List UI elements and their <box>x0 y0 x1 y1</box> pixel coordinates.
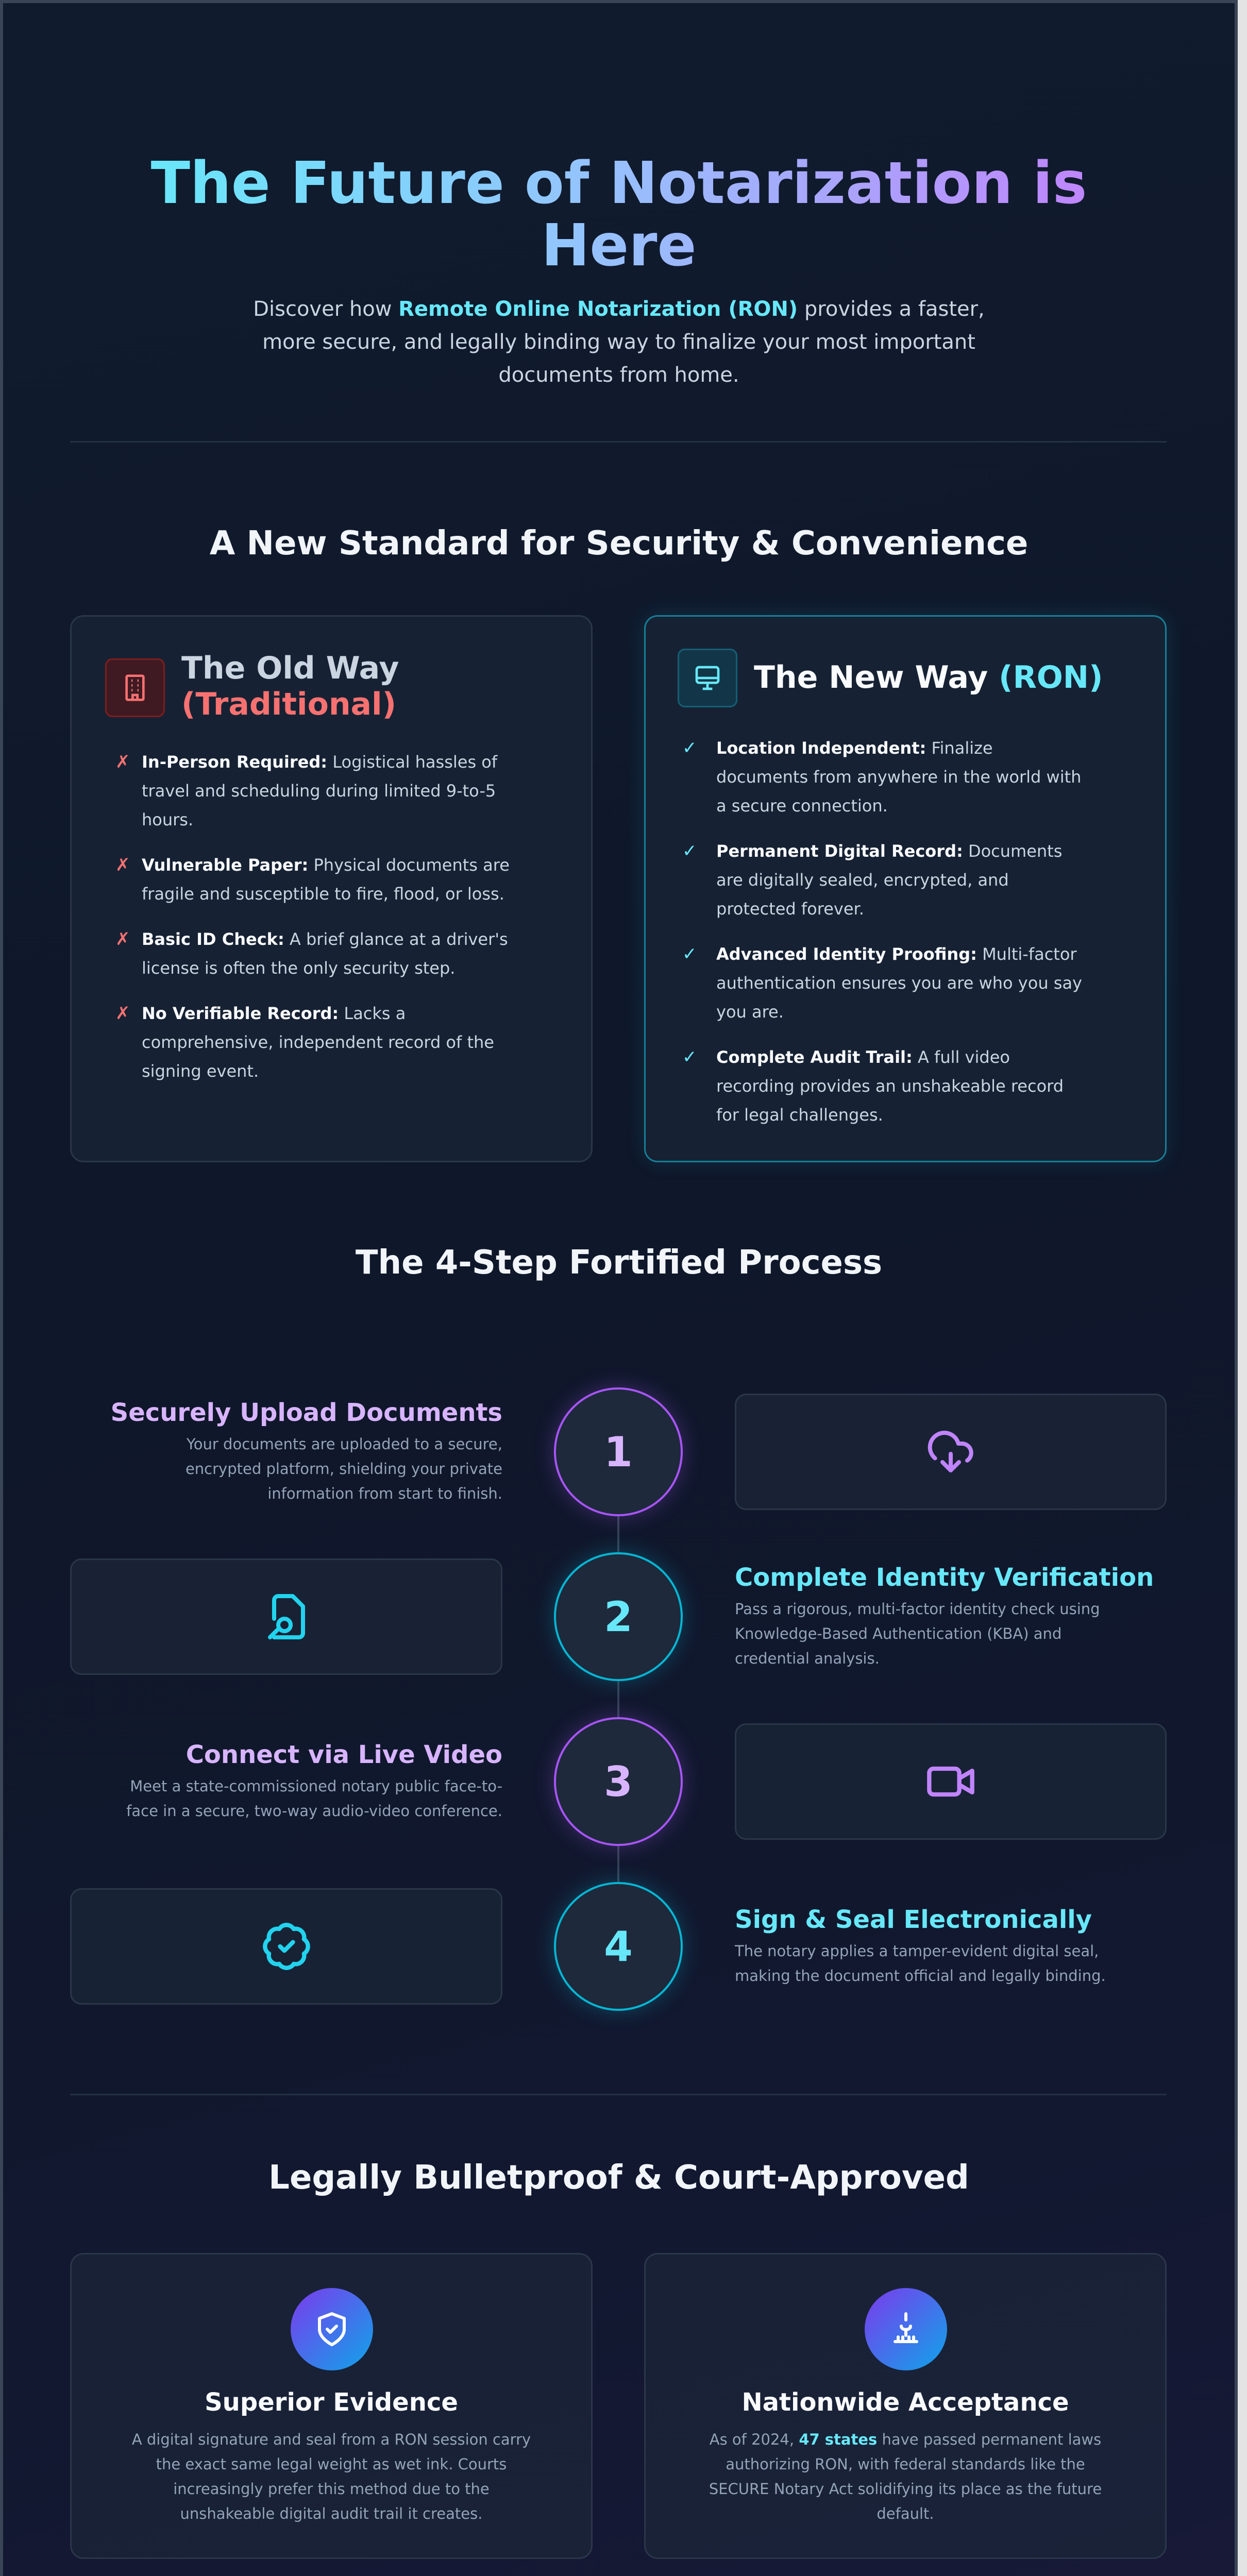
step 1 text: information from start to finish. <box>267 1485 502 1502</box>
old way title <box>181 650 399 722</box>
heading: legally bulletproof: Legally Bulletproof & Court-Approved <box>268 2159 969 2197</box>
nationwide text: authorizing RON, with federal standards like the <box>726 2455 1085 2473</box>
new way list: ✓ <box>682 738 697 758</box>
step 2 text: credential analysis. <box>735 1650 880 1667</box>
old way list: ✗ <box>115 752 130 772</box>
subtitle <box>253 297 985 387</box>
subtitle: more secure, and legally binding way to finalize your most important <box>262 330 975 354</box>
old way list: signing event. <box>142 1061 259 1081</box>
new way title: The New Way (RON) <box>754 659 1103 696</box>
superior evidence text: unshakeable digital audit trail it creates. <box>180 2505 482 2522</box>
old way list: travel and scheduling during limited 9-to-5 <box>142 781 496 801</box>
panel: nationwide acceptance <box>644 2253 1167 2559</box>
superior evidence title: Superior Evidence <box>205 2388 458 2417</box>
new way list: ✓ <box>682 841 697 861</box>
subtitle: documents from home. <box>498 363 739 387</box>
old way list: hours. <box>142 810 193 829</box>
step 1 text: encrypted platform, shielding your private <box>186 1460 502 1478</box>
icon: building <box>105 658 165 717</box>
new way list: you are. <box>716 1002 784 1022</box>
step 4 text <box>735 1905 1106 1985</box>
step 4 number: 4 <box>604 1923 633 1970</box>
superior evidence text: A digital signature and seal from a RON session carry <box>132 2431 531 2448</box>
step 2 icon box: file search <box>70 1558 502 1675</box>
step 1 text: Your documents are uploaded to a secure, <box>187 1435 502 1453</box>
step 4 icon box: badge check <box>70 1888 502 2005</box>
new way list: for legal challenges. <box>716 1105 883 1125</box>
old way list: ✗ <box>115 855 130 875</box>
nationwide title: Nationwide Acceptance <box>742 2388 1069 2417</box>
panel: new way <box>644 615 1167 1162</box>
old way title: (Traditional) <box>181 686 396 722</box>
step 3 text: face in a secure, two-way audio-video conference. <box>126 1802 502 1820</box>
old way list: In-Person Required: Logistical hassles of <box>142 752 497 772</box>
nationwide text: default. <box>877 2505 934 2522</box>
superior evidence text <box>132 2431 531 2522</box>
new way list: protected forever. <box>716 899 864 919</box>
step 3 number <box>554 1717 683 1846</box>
step 2 text: Pass a rigorous, multi-factor identity check using <box>735 1600 1100 1618</box>
step 3 text: Meet a state-commissioned notary public face-to- <box>130 1777 502 1795</box>
nationwide text: As of 2024, 47 states have passed permanent laws <box>710 2431 1101 2448</box>
icon: shield <box>291 2288 373 2370</box>
panel: superior evidence <box>70 2253 593 2559</box>
new way list: Location Independent: Finalize <box>716 738 993 758</box>
superior evidence text: the exact same legal weight as wet ink. Courts <box>156 2455 507 2473</box>
new way list: are digitally sealed, encrypted, and <box>716 870 1009 890</box>
nationwide text <box>709 2431 1102 2522</box>
old way list: Basic ID Check: A brief glance at a driver's <box>142 929 508 949</box>
new way list: ✓ <box>682 944 697 964</box>
step 4 text: Sign & Seal Electronically <box>735 1905 1092 1934</box>
new way list: Permanent Digital Record: Documents <box>716 841 1062 861</box>
new way list <box>682 738 1082 1125</box>
new way list: a secure connection. <box>716 796 888 816</box>
step 1 text: Securely Upload Documents <box>111 1398 502 1427</box>
heading: new standard: A New Standard for Security & Convenience <box>210 524 1028 563</box>
step 3 icon box: video <box>735 1723 1167 1840</box>
old way list: fragile and susceptible to fire, flood, or loss. <box>142 884 504 904</box>
step 1 text <box>111 1398 502 1502</box>
icon: monitor <box>678 649 737 707</box>
panel: old way <box>70 615 593 1162</box>
step 3 text <box>126 1740 502 1820</box>
step 4 text: making the document official and legally binding. <box>735 1967 1106 1985</box>
new way list: ✓ <box>682 1047 697 1067</box>
old way list: license is often the only security step. <box>142 958 455 978</box>
title: Here <box>542 212 696 279</box>
step 1 icon box: cloud download <box>735 1394 1167 1510</box>
new way list: documents from anywhere in the world with <box>716 767 1081 787</box>
old way list: Vulnerable Paper: Physical documents are <box>142 855 510 875</box>
title: The Future of Notarization is <box>151 150 1087 217</box>
step 1 <box>111 1378 1167 2005</box>
step 1 number: 1 <box>604 1428 633 1476</box>
step 2 number <box>554 1552 683 1681</box>
step 3 number: 3 <box>604 1758 633 1805</box>
old way title: The Old Way <box>181 650 399 686</box>
title <box>151 150 1087 279</box>
new way list: authentication ensures you are who you say <box>716 973 1082 993</box>
new way list: Advanced Identity Proofing: Multi-factor <box>716 944 1077 964</box>
step 2 <box>70 1544 1154 2005</box>
nationwide text: SECURE Notary Act solidifying its place as the future <box>709 2480 1102 2498</box>
old way list: ✗ <box>115 929 130 950</box>
old way list: ✗ <box>115 1003 130 1024</box>
step 2 text: Knowledge-Based Authentication (KBA) and <box>735 1625 1061 1642</box>
step 1 number <box>554 1387 683 1516</box>
old way list: No Verifiable Record: Lacks a <box>142 1004 406 1023</box>
step 3 <box>126 1707 1167 2005</box>
old way list: comprehensive, independent record of the <box>142 1032 494 1052</box>
heading: process: The 4-Step Fortified Process <box>356 1244 882 1282</box>
step 4 <box>70 1874 1106 2019</box>
connector line <box>617 1451 619 1946</box>
new way list: Complete Audit Trail: A full video <box>716 1047 1010 1067</box>
step 4 text: The notary applies a tamper-evident digital seal, <box>735 1942 1099 1960</box>
step 4 number <box>554 1882 683 2011</box>
old way list <box>115 752 510 1081</box>
step 2 text <box>735 1563 1154 1667</box>
step 3 text: Connect via Live Video <box>186 1740 502 1769</box>
step 2 text: Complete Identity Verification <box>735 1563 1154 1592</box>
new way list: recording provides an unshakeable record <box>716 1076 1064 1096</box>
icon: landmark <box>865 2288 947 2370</box>
subtitle: Discover how Remote Online Notarization (RON) provides a faster, <box>253 297 985 321</box>
superior evidence text: increasingly prefer this method due to the <box>173 2480 490 2498</box>
step 2 number: 2 <box>604 1593 633 1640</box>
